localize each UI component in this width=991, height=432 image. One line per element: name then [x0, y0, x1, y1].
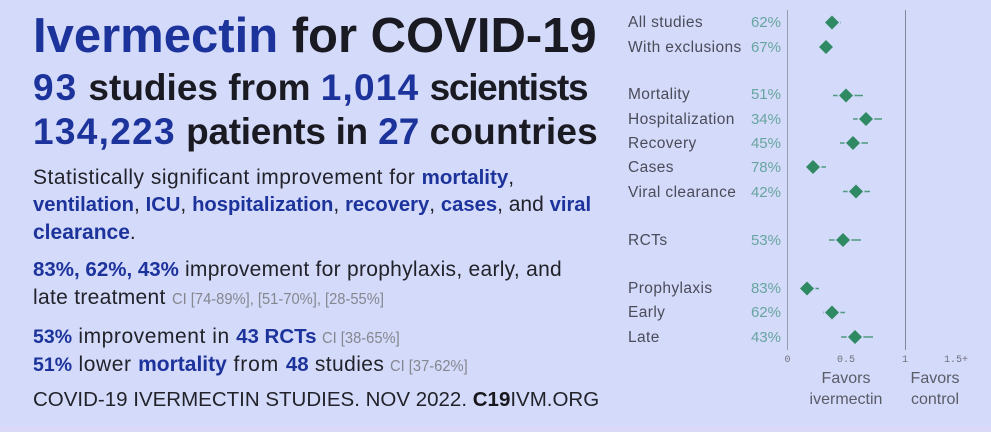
- row percentages: 43%: [751, 329, 781, 346]
- text block: statistically significant improvement: clearance.: [33, 221, 136, 244]
- row percentages: 83%: [751, 280, 781, 297]
- axis tick labels: 1.5+: [944, 355, 968, 366]
- effect diamonds: [800, 16, 873, 344]
- row percentages: 78%: [751, 159, 781, 176]
- subtitle: studies and scientists: 93 studies from 1,014 scientists: [33, 67, 587, 108]
- text block: treatment improvement: [33, 258, 562, 309]
- axis caption: favors control: control: [911, 391, 959, 408]
- axis caption: favors control: Favors: [911, 370, 959, 387]
- bottom strip: [0, 426, 991, 432]
- axis caption: favors ivermectin: [810, 370, 882, 408]
- row labels: [628, 14, 742, 346]
- row percentages: [751, 14, 781, 346]
- axis caption: favors control: [911, 370, 959, 408]
- text block: statistically significant improvement: Statistically significant improvement for mortality,: [33, 166, 514, 189]
- text block: treatment improvement: CI [74-89%], [51-70%], [28-55%]: [172, 291, 384, 308]
- text block: treatment improvement: 83%, 62%, 43% improvement for prophylaxis, early, and: [33, 258, 562, 281]
- axis tick labels: [784, 355, 968, 366]
- row labels: Viral clearance: [628, 184, 736, 201]
- row labels: Late: [628, 329, 660, 346]
- row labels: RCTs: [628, 232, 668, 249]
- row labels: All studies: [628, 14, 703, 31]
- row percentages: 51%: [751, 86, 781, 103]
- text block: treatment improvement: late treatment: [33, 286, 166, 309]
- text block: RCT improvement: CI [38-65%]: [322, 330, 400, 347]
- axis tick labels: 0: [784, 355, 791, 366]
- axis tick labels: 1: [902, 355, 908, 366]
- axis tick labels: 0.5: [837, 355, 855, 366]
- text block: RCT improvement: 53% improvement in 43 RCTs: [33, 325, 317, 348]
- text block: mortality improvement: CI [37-62%]: [390, 358, 468, 375]
- row percentages: 67%: [751, 39, 781, 56]
- row labels: Recovery: [628, 135, 697, 152]
- axis caption: favors ivermectin: Favors: [822, 370, 870, 387]
- row labels: Cases: [628, 159, 674, 176]
- axis caption: favors ivermectin: ivermectin: [810, 391, 882, 408]
- row labels: Hospitalization: [628, 111, 735, 128]
- row percentages: 45%: [751, 135, 781, 152]
- subtitle: patients and countries: 134,223 patients in 27 countries: [33, 111, 598, 152]
- footer source: COVID-19 IVERMECTIN STUDIES. NOV 2022. C19IVM.ORG: [33, 388, 599, 411]
- row percentages: 62%: [751, 14, 781, 31]
- axis line at 0: [786, 10, 788, 350]
- row labels: Mortality: [628, 86, 690, 103]
- row percentages: 62%: [751, 304, 781, 321]
- text block: statistically significant improvement: ventilation, ICU, hospitalization, recovery, cases, and viral: [33, 193, 591, 216]
- row percentages: 42%: [751, 184, 781, 201]
- axis line at 1: [904, 10, 906, 350]
- row labels: Early: [628, 304, 665, 321]
- title: Ivermectin for COVID-19: [33, 9, 597, 63]
- row labels: With exclusions: [628, 39, 742, 56]
- confidence intervals: [803, 22, 882, 337]
- row labels: Prophylaxis: [628, 280, 713, 297]
- row percentages: 34%: [751, 111, 781, 128]
- text block: statistically significant improvement: [33, 166, 591, 244]
- text block: mortality improvement: 51% lower mortality from 48 studies: [33, 353, 384, 376]
- row percentages: 53%: [751, 232, 781, 249]
